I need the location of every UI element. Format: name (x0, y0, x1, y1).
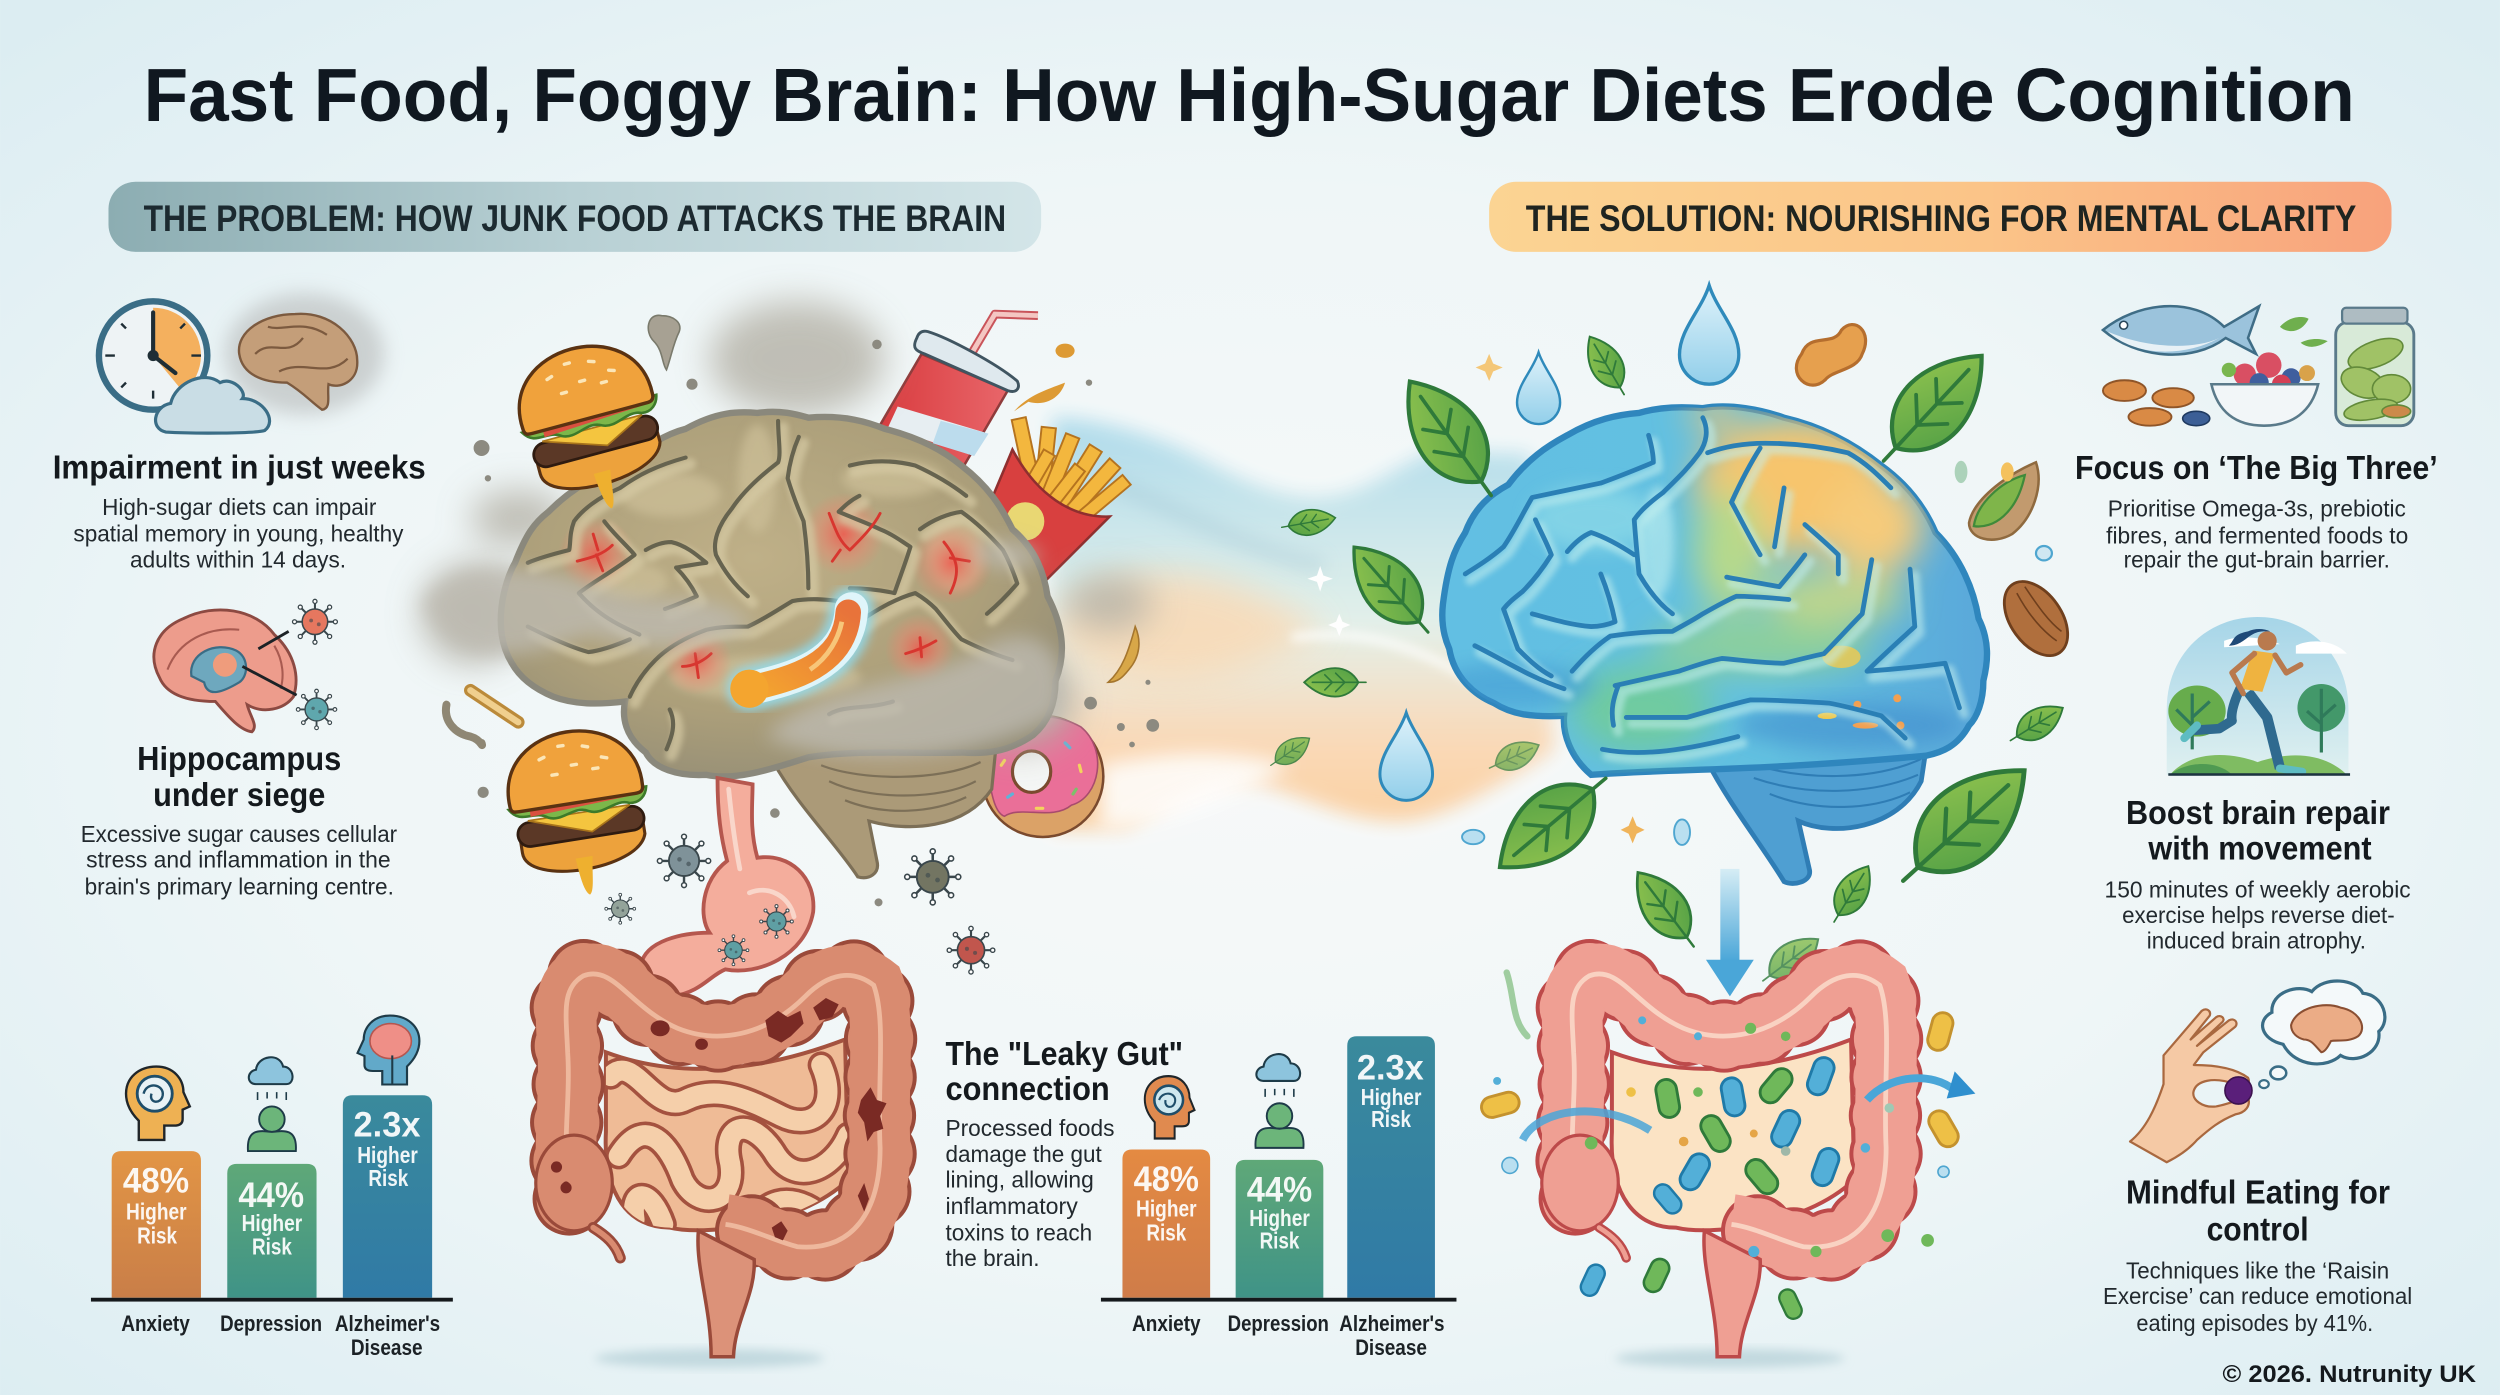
burger, upper left (504, 331, 682, 526)
healthy brain (1435, 402, 1987, 883)
water drops (1380, 285, 1739, 800)
text block: brain repair with movement (2105, 795, 2411, 954)
bar: anxiety 48%: 48% (1134, 1160, 1199, 1199)
text block: impairment in just weeks: adults within 14 days. (130, 547, 346, 573)
bar: anxiety 48%: Risk (137, 1223, 177, 1249)
text block: impairment in just weeks: spatial memory in young, healthy (73, 520, 404, 546)
bar: anxiety 48%: Higher (126, 1199, 187, 1225)
scattered grease and particles (446, 315, 1159, 906)
bar: anxiety 48%: Higher (1136, 1195, 1197, 1221)
icon: hippocampus with viruses (154, 599, 337, 732)
viruses around left gut (605, 834, 995, 974)
text block: mindful eating: Mindful Eating for (2126, 1175, 2390, 1212)
burger, lower left (498, 721, 662, 905)
cerebellum and stem (1708, 749, 1926, 883)
text block: mindful eating: eating episodes by 41%. (2136, 1310, 2373, 1336)
text block: leaky gut connection: the brain. (945, 1245, 1040, 1271)
bacteria (1641, 1064, 1804, 1322)
text block: impairment in just weeks: High-sugar diets can impair (102, 494, 377, 520)
text block: big three: fibres, and fermented foods to (2106, 523, 2408, 549)
heading pill: the problem: THE PROBLEM: HOW JUNK FOOD ATTACKS THE BRAIN (144, 198, 1006, 239)
text block: big three: repair the gut-brain barrier. (2124, 547, 2390, 573)
axis labels: Disease (351, 1335, 423, 1360)
text block: leaky gut connection: The "Leaky Gut" (945, 1036, 1183, 1073)
bar: alzheimer's 2.3x: 2.3x (1357, 1048, 1424, 1087)
bar: depression 44%: 44% (238, 1176, 304, 1215)
right intestine, healthy with bacteria (1479, 973, 1975, 1368)
bar: depression 44%: Risk (252, 1234, 292, 1260)
bar: depression 44%: Higher (242, 1210, 302, 1236)
axis labels (1132, 1311, 1445, 1360)
copyright: © 2026. Nutrunity UK (2223, 1361, 2477, 1388)
text block: leaky gut connection: Processed foods (945, 1115, 1114, 1141)
text block: brain repair with movement: exercise helps reverse diet- (2122, 902, 2395, 928)
left gut: stomach and esophagus (641, 778, 813, 996)
icon: anxiety head (1145, 1076, 1195, 1138)
text block: hippocampus under siege: stress and inflammation in the (86, 846, 391, 872)
bar: anxiety 48%: Risk (1146, 1219, 1186, 1245)
text block: mindful eating: control (2207, 1211, 2309, 1248)
text block: leaky gut connection: toxins to reach (945, 1219, 1092, 1245)
bar: depression 44% (227, 1164, 317, 1298)
text block: hippocampus under siege: Excessive sugar causes cellular (81, 821, 397, 847)
bar: depression 44%: Risk (1260, 1227, 1300, 1253)
donut (982, 716, 1103, 837)
icon: clock, cloud and foggy brain (99, 293, 384, 433)
chart: risk bars, left (91, 1016, 453, 1360)
text block: leaky gut connection: damage the gut (945, 1141, 1102, 1167)
text block: big three: Prioritise Omega-3s, prebiotic (2108, 496, 2406, 522)
foggy brain (501, 412, 1062, 878)
bar: anxiety 48% (112, 1151, 201, 1298)
text block: leaky gut connection: inflammatory (945, 1193, 1078, 1219)
bar: alzheimer's 2.3x (1347, 1036, 1435, 1298)
smoke behind brain (421, 301, 1153, 749)
axis labels (121, 1311, 440, 1360)
bar: anxiety 48% (1122, 1149, 1210, 1298)
icon: raisin between fingers with thought bubble (2130, 981, 2385, 1162)
fries (992, 417, 1131, 588)
bar: depression 44% (1236, 1160, 1323, 1298)
text block: hippocampus under siege (81, 741, 397, 899)
text block: hippocampus under siege: Hippocampus (137, 741, 341, 778)
text block: brain repair with movement: induced brain atrophy. (2147, 928, 2366, 954)
axis labels: Alzheimer's (1339, 1311, 1445, 1336)
icon: depression figure (248, 1057, 296, 1151)
arrow: brain to gut (1706, 869, 1754, 996)
text block: impairment in just weeks (53, 449, 426, 573)
axis labels: Disease (1355, 1335, 1427, 1360)
axis labels: Anxiety (121, 1311, 190, 1336)
bar: anxiety 48%: 48% (123, 1162, 189, 1201)
bar: alzheimer's 2.3x: Risk (368, 1165, 408, 1191)
text block: big three: Focus on ‘The Big Three’ (2075, 450, 2438, 487)
text block: leaky gut connection: lining, allowing (945, 1167, 1094, 1193)
soda cup (877, 314, 1038, 478)
cerebellum and stem (773, 741, 997, 878)
text block: mindful eating (2103, 1175, 2412, 1336)
flow ribbon between brains (1044, 418, 1555, 829)
bar: alzheimer's 2.3x: 2.3x (354, 1106, 421, 1145)
text block: hippocampus under siege: brain's primary learning centre. (85, 873, 394, 899)
text block: brain repair with movement: with movement (2147, 830, 2372, 867)
heading pill: the solution: THE SOLUTION: NOURISHING FOR MENTAL CLARITY (1526, 198, 2356, 239)
nuts and small particles (1462, 325, 2081, 845)
axis labels: Alzheimer's (335, 1311, 440, 1336)
left intestine, damaged (536, 974, 887, 1368)
bar: alzheimer's 2.3x: Higher (1361, 1084, 1421, 1110)
axis labels: Depression (1228, 1311, 1329, 1336)
smoke drifting over brain (423, 541, 1063, 757)
bar: depression 44%: 44% (1247, 1170, 1312, 1209)
text block: leaky gut connection (945, 1036, 1183, 1271)
text block: mindful eating: Techniques like the ‘Raisin (2126, 1258, 2389, 1284)
title: Fast Food, Foggy Brain: How High-Sugar Diets Erode Cognition (144, 53, 2355, 137)
axis labels: Anxiety (1132, 1311, 1201, 1336)
text block: mindful eating: Exercise’ can reduce emotional (2103, 1283, 2412, 1309)
icon: runner in park (2167, 617, 2350, 776)
leaves around healthy brain (1265, 329, 2070, 994)
bar: alzheimer's 2.3x (343, 1095, 432, 1298)
bar: alzheimer's 2.3x: Higher (357, 1142, 418, 1168)
chart: risk bars, right (1101, 1036, 1456, 1360)
text block: hippocampus under siege: under siege (153, 777, 325, 814)
arrow: nutrients out (1523, 1071, 1975, 1140)
text block: big three (2075, 450, 2438, 573)
text block: impairment in just weeks: Impairment in just weeks (53, 449, 426, 486)
bar: depression 44%: Higher (1249, 1205, 1310, 1231)
text block: brain repair with movement: Boost brain repair (2126, 795, 2390, 832)
heading pill: the solution (1489, 182, 2392, 252)
icon: fish, nuts, berries and fermented jar (2103, 306, 2414, 426)
heading pill: the problem (108, 182, 1041, 252)
bar: alzheimer's 2.3x: Risk (1371, 1106, 1411, 1132)
axis labels: Depression (220, 1311, 322, 1336)
icon: depression figure (1255, 1054, 1304, 1148)
icon: anxiety head (126, 1067, 190, 1140)
text block: leaky gut connection: connection (945, 1071, 1110, 1108)
icon: alzheimer's head (358, 1016, 419, 1084)
hippocampus highlight (730, 609, 851, 708)
text block: brain repair with movement: 150 minutes of weekly aerobic (2105, 877, 2411, 903)
